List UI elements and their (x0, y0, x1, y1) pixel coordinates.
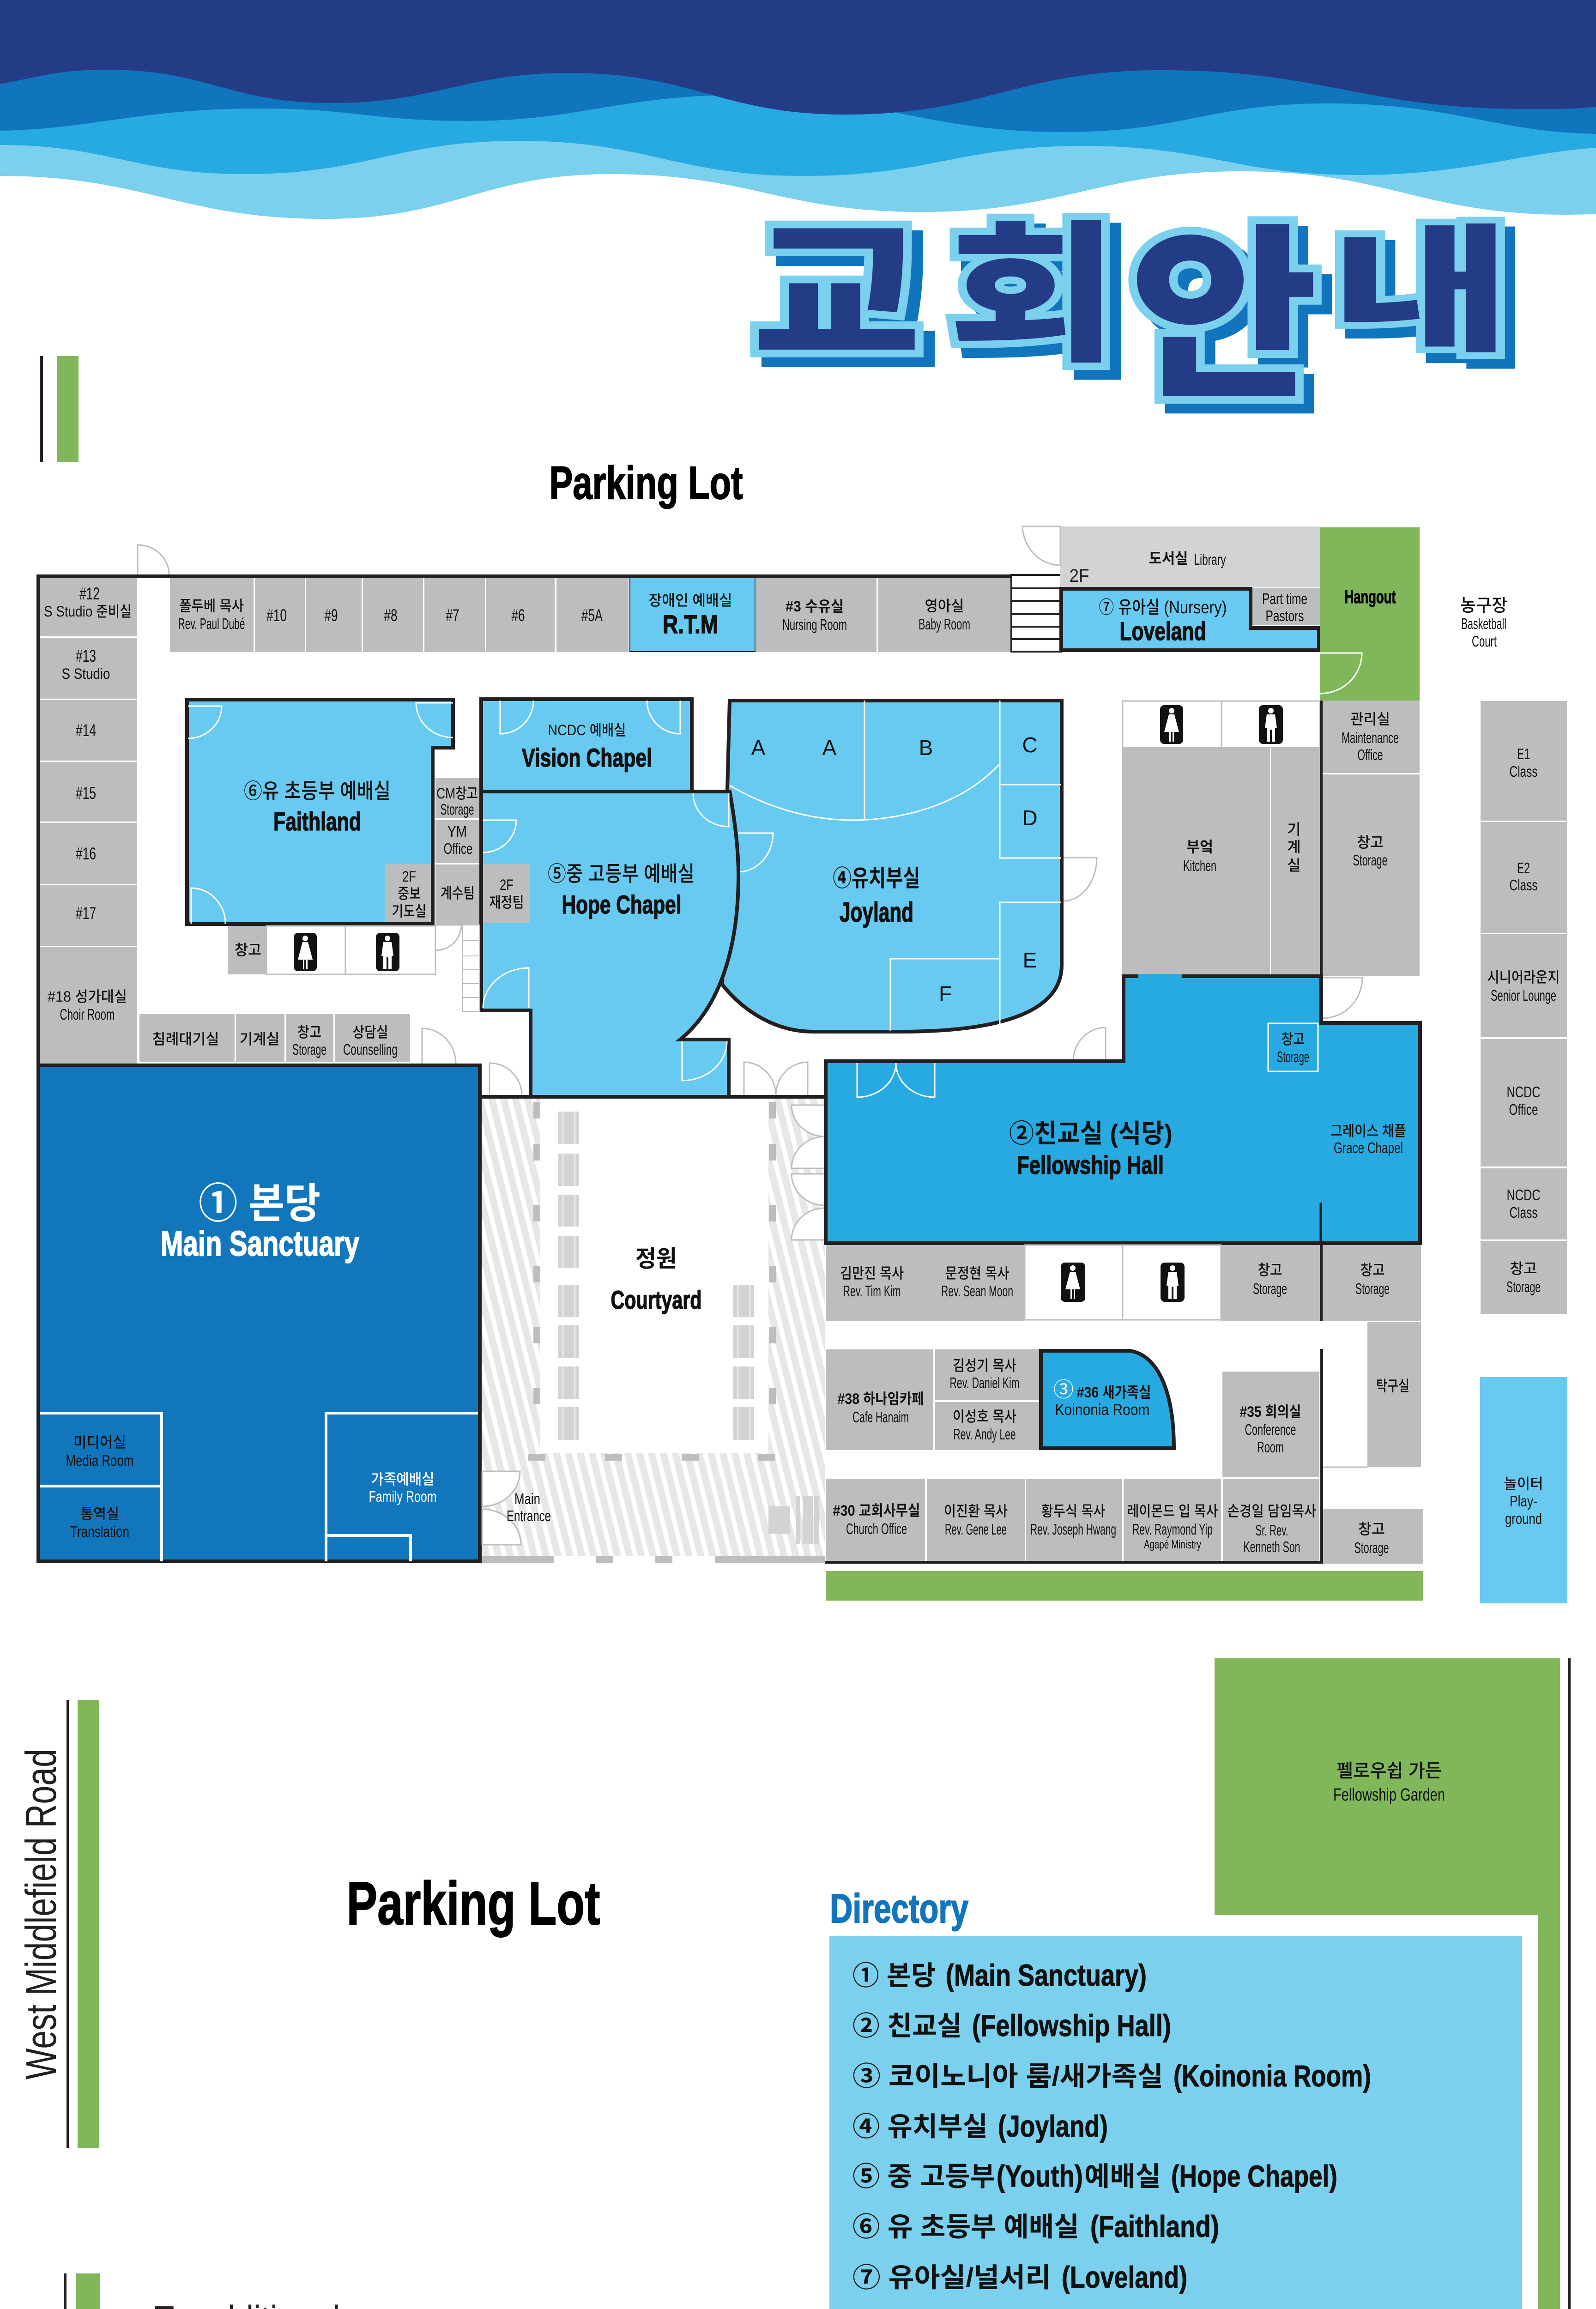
road marker top left (40, 356, 79, 462)
directory item 5: (Hope Chapel) (1171, 2159, 1337, 2193)
mechanical room west: 기계실 (239, 1031, 280, 1047)
2F finance team: 2F (500, 876, 514, 893)
kitchen: Kitchen (1183, 857, 1216, 874)
basketball court label: Basketball (1461, 615, 1506, 632)
baby room: Baby Room (919, 616, 970, 633)
room 16 (40, 823, 137, 884)
main sanctuary: Translation (70, 1523, 129, 1540)
room 5A (556, 578, 629, 652)
room 17 (40, 885, 137, 946)
room 8 (363, 578, 423, 652)
Rev Tim Kim office: Rev. Tim Kim (843, 1282, 901, 1300)
senior pastor office: 손경일 담임목사 (1227, 1503, 1316, 1519)
faithland: Faithland (273, 807, 361, 836)
room 14: #14 (76, 721, 96, 740)
Rev Raymond Yip office: 레이몬드 입 목사 (1127, 1503, 1218, 1519)
room RTM (630, 578, 755, 652)
door: west restroom (435, 925, 461, 950)
room 9: #9 (324, 606, 338, 625)
class E1: E1 (1517, 745, 1530, 762)
main sanctuary: 가족예배실 (371, 1471, 434, 1487)
mechanical room: 기 (1287, 821, 1301, 838)
maintenance office: 관리실 (1350, 711, 1390, 727)
room 15: #15 (76, 784, 96, 803)
loveland: Loveland (1119, 617, 1206, 646)
YM office: Office (443, 840, 473, 857)
NCDC class: Class (1509, 1204, 1538, 1221)
courtyard: Courtyard (611, 1285, 702, 1314)
upper parking lot label: Parking Lot (550, 457, 743, 509)
library: Library (1194, 551, 1226, 568)
south restrooms (1025, 1245, 1221, 1320)
CM storage (435, 778, 479, 818)
room 14 (40, 700, 137, 761)
Rev Raymond Yip office (1124, 1479, 1221, 1561)
room 13: S Studio (62, 665, 110, 682)
directory panel (829, 1936, 1522, 2309)
class E1 (1481, 701, 1567, 821)
Rev Gene Lee office: Rev. Gene Lee (945, 1521, 1007, 1538)
directory item 4: ④ 유치부실 (852, 2112, 988, 2142)
room 12: #12 (79, 584, 100, 603)
mechanical room: 실 (1287, 857, 1301, 874)
courtyard: 정원 (635, 1246, 677, 1272)
west middlefield road marker (66, 1700, 99, 2148)
hope chapel: ⑤중 고등부 예배실 (548, 862, 695, 886)
door: joyland east (1064, 858, 1097, 901)
accounting team: 계수팀 (441, 885, 475, 901)
senior lounge: 시니어라운지 (1487, 969, 1560, 985)
conference room: Room (1257, 1439, 1284, 1456)
room 3 nursing: #3 수유실 (786, 598, 844, 615)
doors: corridor (422, 1028, 1106, 1095)
storage west: Storage (292, 1041, 326, 1058)
title: 내 (1342, 190, 1521, 389)
courtyard (482, 1099, 825, 1563)
Rev Andy Lee office: Rev. Andy Lee (953, 1426, 1016, 1443)
storage south east (1322, 1509, 1423, 1564)
Rev Sean Moon office: 문정현 목사 (945, 1265, 1010, 1281)
church office: #30 교회사무실 (833, 1502, 920, 1519)
class E2 (1481, 822, 1567, 933)
directory item 7: ⑦ 유아실/널서리 (852, 2263, 1051, 2293)
title (752, 166, 1521, 445)
vision chapel: Vision Chapel (522, 743, 652, 772)
cafe hanaim: #38 하나임카페 (838, 1390, 924, 1407)
mechanical room: 계 (1287, 839, 1301, 855)
directory item 2: ② 친교실 (852, 2011, 962, 2041)
baby room (878, 578, 1011, 652)
Rev Tim Kim office (826, 1245, 925, 1321)
room 16: #16 (76, 844, 96, 863)
storage west (286, 1014, 333, 1062)
2F prayer room (385, 864, 431, 922)
far east storage: 창고 (1510, 1260, 1537, 1277)
directory heading: Directory (830, 1886, 968, 1931)
baptism waiting room: 침례대기실 (152, 1031, 219, 1047)
senior lounge: Senior Lounge (1491, 987, 1556, 1004)
koinonia room: ③ (1053, 1378, 1074, 1401)
directory item 4: (Joyland) (998, 2109, 1108, 2143)
joyland: F (939, 982, 952, 1006)
outer wall north and west (38, 576, 1060, 1064)
cafe hanaim: Cafe Hanaim (852, 1408, 909, 1426)
office: Rev Paul Dube (170, 578, 254, 652)
title: 회 (960, 182, 1129, 402)
far east storage: Storage (1506, 1278, 1541, 1295)
church office (826, 1479, 925, 1561)
2F finance team (483, 864, 530, 923)
church office: Church Office (846, 1520, 907, 1537)
maintenance office: Maintenance (1342, 729, 1399, 746)
senior pastor office (1223, 1479, 1319, 1561)
directory item 2: (Fellowship Hall) (972, 2008, 1171, 2043)
storage west: 창고 (297, 1024, 321, 1040)
hangout (1320, 527, 1420, 701)
directory item 7: (Loveland) (1062, 2260, 1187, 2294)
table tennis room: 탁구실 (1376, 1378, 1409, 1394)
title: 내 (1331, 181, 1511, 379)
joyland: A (751, 736, 766, 760)
top wave decoration (0, 0, 1596, 219)
vision chapel: NCDC 예배실 (548, 722, 626, 738)
table tennis room (1322, 1322, 1421, 1467)
room 7: #7 (446, 606, 459, 625)
storage south east: 창고 (1358, 1521, 1385, 1537)
Rev Gene Lee office: 이진환 목사 (944, 1503, 1008, 1519)
title: 교 (752, 167, 921, 397)
green corner left (65, 2273, 149, 2309)
senior pastor office: Sr. Rev. (1255, 1522, 1288, 1539)
hope chapel (481, 792, 738, 1097)
hope chapel: Hope Chapel (562, 890, 682, 919)
YM office: YM (447, 823, 467, 840)
room RTM: 장애인 예배실 (648, 592, 732, 609)
storage south 2: Storage (1355, 1280, 1390, 1297)
joyland: C (1022, 733, 1038, 757)
maintenance office (1323, 701, 1420, 773)
door: east storage (1323, 978, 1362, 1018)
Rev Sean Moon office (925, 1245, 1024, 1321)
basketball court label: 농구장 (1460, 596, 1507, 616)
room RTM: R.T.M (663, 610, 718, 639)
directory item 3 (852, 2059, 1371, 2093)
storage south 2: 창고 (1360, 1262, 1384, 1278)
room 3 nursing: Nursing Room (782, 616, 847, 633)
office: Rev Paul Dube: 폴두베 목사 (179, 598, 244, 614)
class E2: E2 (1517, 859, 1530, 876)
room 18 choir: Choir Room (60, 1006, 115, 1023)
east storage: Storage (1353, 852, 1387, 869)
joyland: B (919, 736, 933, 760)
room 13: #13 (76, 647, 96, 665)
road label: West Middlefield Road (17, 1749, 65, 2079)
directory item 5: ⑤ 중 고등부 (852, 2162, 995, 2192)
counselling: Counselling (343, 1041, 398, 1058)
directory item 4 (852, 2109, 1108, 2143)
joyland: E (1023, 948, 1037, 972)
NCDC class (1481, 1168, 1567, 1239)
room 8: #8 (384, 606, 397, 625)
north stairs (1011, 575, 1061, 652)
directory item 1 (852, 1958, 1147, 1992)
NCDC class: NCDC (1506, 1186, 1541, 1203)
class E2: Class (1509, 876, 1538, 894)
2F prayer room: 중보 (398, 885, 421, 902)
room 17: #17 (76, 904, 96, 923)
directory item 1: (Main Sanctuary) (946, 1958, 1147, 1992)
lower parking lot label: Parking Lot (346, 1869, 600, 1937)
library (1060, 526, 1320, 587)
playground (1480, 1377, 1567, 1603)
fellowship hall: 그레이스 채플 (1330, 1123, 1406, 1139)
directory item 2 (852, 2008, 1171, 2043)
title: 안 (1140, 175, 1329, 445)
west restrooms (266, 926, 435, 974)
central stairs (463, 925, 479, 1011)
green border and fellowship garden (353, 1658, 1569, 2309)
storage south 1: 창고 (1258, 1262, 1282, 1278)
2F finance team: 재정팀 (490, 894, 524, 911)
title: 회 (948, 172, 1118, 392)
Rev Joseph Hwang office (1026, 1479, 1122, 1561)
title: 안 (1130, 166, 1318, 435)
directory item 5: 예배실 (1084, 2162, 1161, 2192)
room 10: #10 (266, 606, 287, 625)
basketball court label (1460, 596, 1507, 650)
cafe hanaim (826, 1349, 933, 1450)
koinonia room (1041, 1351, 1174, 1448)
Rev Tim Kim office: 김만진 목사 (840, 1265, 904, 1281)
green border and fellowship garden: Fellowship Garden (1333, 1785, 1445, 1805)
main sanctuary: 통역실 (80, 1505, 119, 1522)
counselling (335, 1014, 410, 1062)
far east storage (1481, 1241, 1567, 1314)
main sanctuary: Main Sanctuary (161, 1224, 359, 1263)
office: Rev Paul Dube: Rev. Paul Dubé (178, 615, 245, 632)
room 6: #6 (512, 606, 525, 625)
courtyard: Entrance (507, 1507, 551, 1524)
senior pastor office: Kenneth Son (1243, 1538, 1300, 1555)
room 13 (40, 638, 137, 699)
playground: ground (1505, 1510, 1542, 1527)
conference room: #35 회의실 (1239, 1403, 1301, 1420)
loveland: ⑦ 유아실 (Nursery) (1099, 598, 1227, 617)
east storage: 창고 (1357, 834, 1384, 851)
Rev Daniel Kim office: Rev. Daniel Kim (949, 1374, 1020, 1391)
storage in fellowship hall: Storage (1277, 1048, 1309, 1065)
2F prayer room: 2F (402, 868, 416, 885)
YM office (435, 820, 479, 863)
room 9 (306, 578, 362, 652)
Rev Raymond Yip office: Agapé Ministry (1144, 1537, 1201, 1551)
title: 교 (764, 176, 932, 406)
hangout: Hangout (1345, 587, 1396, 607)
storage south 2 (1323, 1245, 1421, 1321)
loveland (1061, 589, 1319, 650)
NCDC office: NCDC (1506, 1083, 1541, 1100)
main sanctuary: 미디어실 (73, 1434, 126, 1451)
room 5A: #5A (581, 606, 603, 625)
room 3 nursing (756, 578, 877, 652)
library: 도서실 (1149, 550, 1188, 567)
maintenance office: Office (1358, 746, 1383, 763)
mechanical room west (236, 1014, 284, 1062)
door: north west entry (138, 545, 169, 574)
conference room: Conference (1245, 1421, 1296, 1438)
Rev Joseph Hwang office: 황두식 목사 (1041, 1503, 1106, 1519)
directory item 5: (Youth) (997, 2159, 1083, 2193)
Rev Daniel Kim office (935, 1349, 1039, 1400)
part time pastors: Part time (1262, 590, 1307, 607)
mechanical room (1271, 748, 1320, 975)
joyland (722, 701, 1062, 1032)
2F prayer room: 기도실 (392, 903, 427, 919)
directory item 5 (852, 2159, 1337, 2193)
main sanctuary (38, 1065, 480, 1561)
kitchen (1122, 748, 1270, 975)
Rev Andy Lee office: 이성호 목사 (953, 1408, 1016, 1425)
directory item 3: ③ 코이노니아 룸/새가족실 (852, 2061, 1163, 2091)
NCDC office (1481, 1039, 1567, 1167)
storage south east: Storage (1354, 1539, 1389, 1556)
NCDC office: Office (1509, 1101, 1538, 1118)
directory item 7 (852, 2260, 1187, 2294)
Rev Andy Lee office (935, 1402, 1039, 1450)
CM storage: Storage (441, 801, 474, 818)
courtyard north wall (480, 1095, 826, 1099)
CM storage: CM창고 (436, 785, 478, 802)
east storage (1323, 774, 1420, 976)
south wall (825, 1243, 1322, 1562)
Rev Raymond Yip office: Rev. Raymond Yip (1132, 1521, 1213, 1538)
main sanctuary: Family Room (369, 1488, 437, 1505)
playground: 놀이터 (1504, 1475, 1543, 1492)
green border and fellowship garden: 펠로우쉽 가든 (1336, 1761, 1442, 1781)
kitchen: 부엌 (1186, 839, 1213, 855)
room 18 choir (40, 947, 137, 1064)
accounting team (435, 864, 479, 925)
part time pastors (1252, 588, 1320, 625)
fellowship hall: Fellowship Hall (1017, 1150, 1164, 1179)
storage south 1: Storage (1253, 1280, 1287, 1297)
fellowship hall (826, 974, 1420, 1243)
joyland: Joyland (840, 897, 913, 928)
room 15 (40, 762, 137, 822)
Rev Joseph Hwang office: Rev. Joseph Hwang (1030, 1521, 1116, 1538)
conference room (1222, 1372, 1319, 1477)
class E1: Class (1509, 763, 1538, 780)
storage in fellowship hall (1268, 1023, 1318, 1071)
playground: Play- (1510, 1493, 1537, 1510)
courtyard: Main (514, 1490, 540, 1507)
fellowship hall: ②친교실 (식당) (1009, 1119, 1173, 1148)
directory item 1: ① 본당 (852, 1961, 936, 1991)
directory item 6: (Faithland) (1090, 2209, 1219, 2243)
room 6 (486, 578, 555, 652)
joyland: ④유치부실 (833, 865, 920, 891)
baby room: 영아실 (925, 598, 964, 614)
west storage: 창고 (235, 942, 261, 958)
Rev Daniel Kim office: 김성기 목사 (953, 1357, 1016, 1374)
baptism waiting room (139, 1014, 235, 1062)
Rev Sean Moon office: Rev. Sean Moon (941, 1282, 1013, 1300)
joyland: D (1022, 806, 1038, 830)
joyland: A (822, 736, 837, 760)
koinonia room: #36 새가족실 (1077, 1384, 1151, 1401)
door: library (1022, 526, 1060, 565)
room 10 (255, 578, 305, 652)
Rev Gene Lee office (927, 1479, 1025, 1561)
room 12 (40, 578, 137, 636)
fellowship hall: Grace Chapel (1334, 1139, 1403, 1156)
faithland: ⑥유 초등부 예배실 (244, 779, 391, 803)
room 7 (424, 578, 485, 652)
green strip (826, 1571, 1423, 1601)
directory item 6: ⑥ 유 초등부 예배실 (852, 2212, 1079, 2242)
library: 2F (1070, 566, 1089, 586)
koinonia room: Koinonia Room (1055, 1401, 1150, 1419)
storage in fellowship hall: 창고 (1282, 1031, 1305, 1047)
senior lounge (1481, 934, 1567, 1037)
faithland (187, 700, 453, 924)
room 18 choir: #18 성가대실 (48, 988, 127, 1005)
main sanctuary: ① 본당 (199, 1181, 320, 1227)
basketball court label: Court (1472, 633, 1497, 650)
vision chapel (481, 699, 692, 792)
storage south 1 (1221, 1245, 1320, 1321)
directory item 3: (Koinonia Room) (1173, 2059, 1371, 2093)
counselling: 상담실 (353, 1024, 388, 1040)
room 12: S Studio 준비실 (44, 603, 132, 620)
part time pastors: Pastors (1265, 607, 1304, 624)
east interior wall (1320, 701, 1323, 1023)
main sanctuary: Media Room (66, 1452, 134, 1469)
directory item 6 (852, 2209, 1219, 2243)
west storage (228, 926, 266, 974)
east restrooms (1123, 701, 1320, 748)
